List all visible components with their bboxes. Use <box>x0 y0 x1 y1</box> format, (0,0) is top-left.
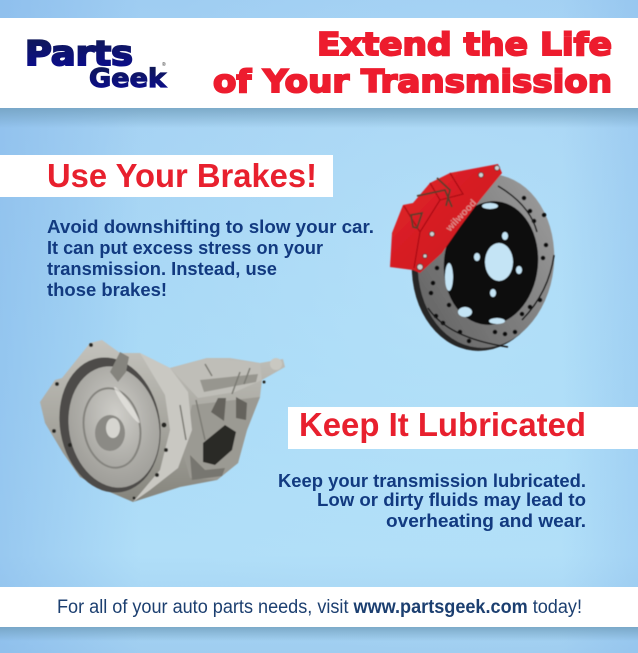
text block: brakes advice: Avoid downshifting to slow your car. <box>47 217 374 237</box>
heading band: Keep It Lubricated: Keep It Lubricated <box>299 406 586 443</box>
logo: Parts Geek <box>25 34 167 94</box>
title <box>213 27 612 100</box>
text block: lubrication advice: Low or dirty fluids may lead to <box>317 490 586 510</box>
red caliper <box>390 164 502 273</box>
text block: brakes advice: those brakes! <box>47 280 167 300</box>
icon: brake disc and red caliper: wilwood <box>443 198 479 235</box>
text block: brakes advice: transmission. Instead, use <box>47 259 277 279</box>
hub hole and bolt holes <box>445 203 522 324</box>
gearbox body shading <box>170 358 262 398</box>
icon: brake disc and red caliper <box>390 164 563 358</box>
logo: Parts Geek: Parts <box>25 34 133 74</box>
heading band: Use Your Brakes: Use Your Brakes! <box>47 157 317 194</box>
panel: keep it lubricated <box>278 406 638 531</box>
logo: Parts Geek: ® <box>162 61 166 68</box>
icon: automatic transmission <box>40 340 285 502</box>
footer text: For all of your auto parts needs, visit www.partsgeek.com today! <box>57 597 582 618</box>
header band <box>0 18 638 128</box>
text block: lubrication advice <box>278 471 586 531</box>
rotor slots <box>428 186 554 347</box>
text block: lubrication advice: Keep your transmission lubricated. <box>278 471 586 491</box>
drilled rotor holes <box>429 196 548 343</box>
panel: use your brakes <box>0 155 374 300</box>
title: Extend the Life <box>317 27 612 63</box>
footer band <box>0 587 638 641</box>
text block: lubrication advice: overheating and wear. <box>386 511 586 531</box>
valve body and castings <box>203 425 236 465</box>
title: of Your Transmission <box>213 64 612 100</box>
text block: brakes advice: It can put excess stress on your <box>47 238 323 258</box>
bolts <box>52 343 266 500</box>
text block: brakes advice <box>47 217 374 300</box>
logo: Parts Geek: Geek <box>89 64 167 94</box>
bell housing <box>49 349 171 501</box>
